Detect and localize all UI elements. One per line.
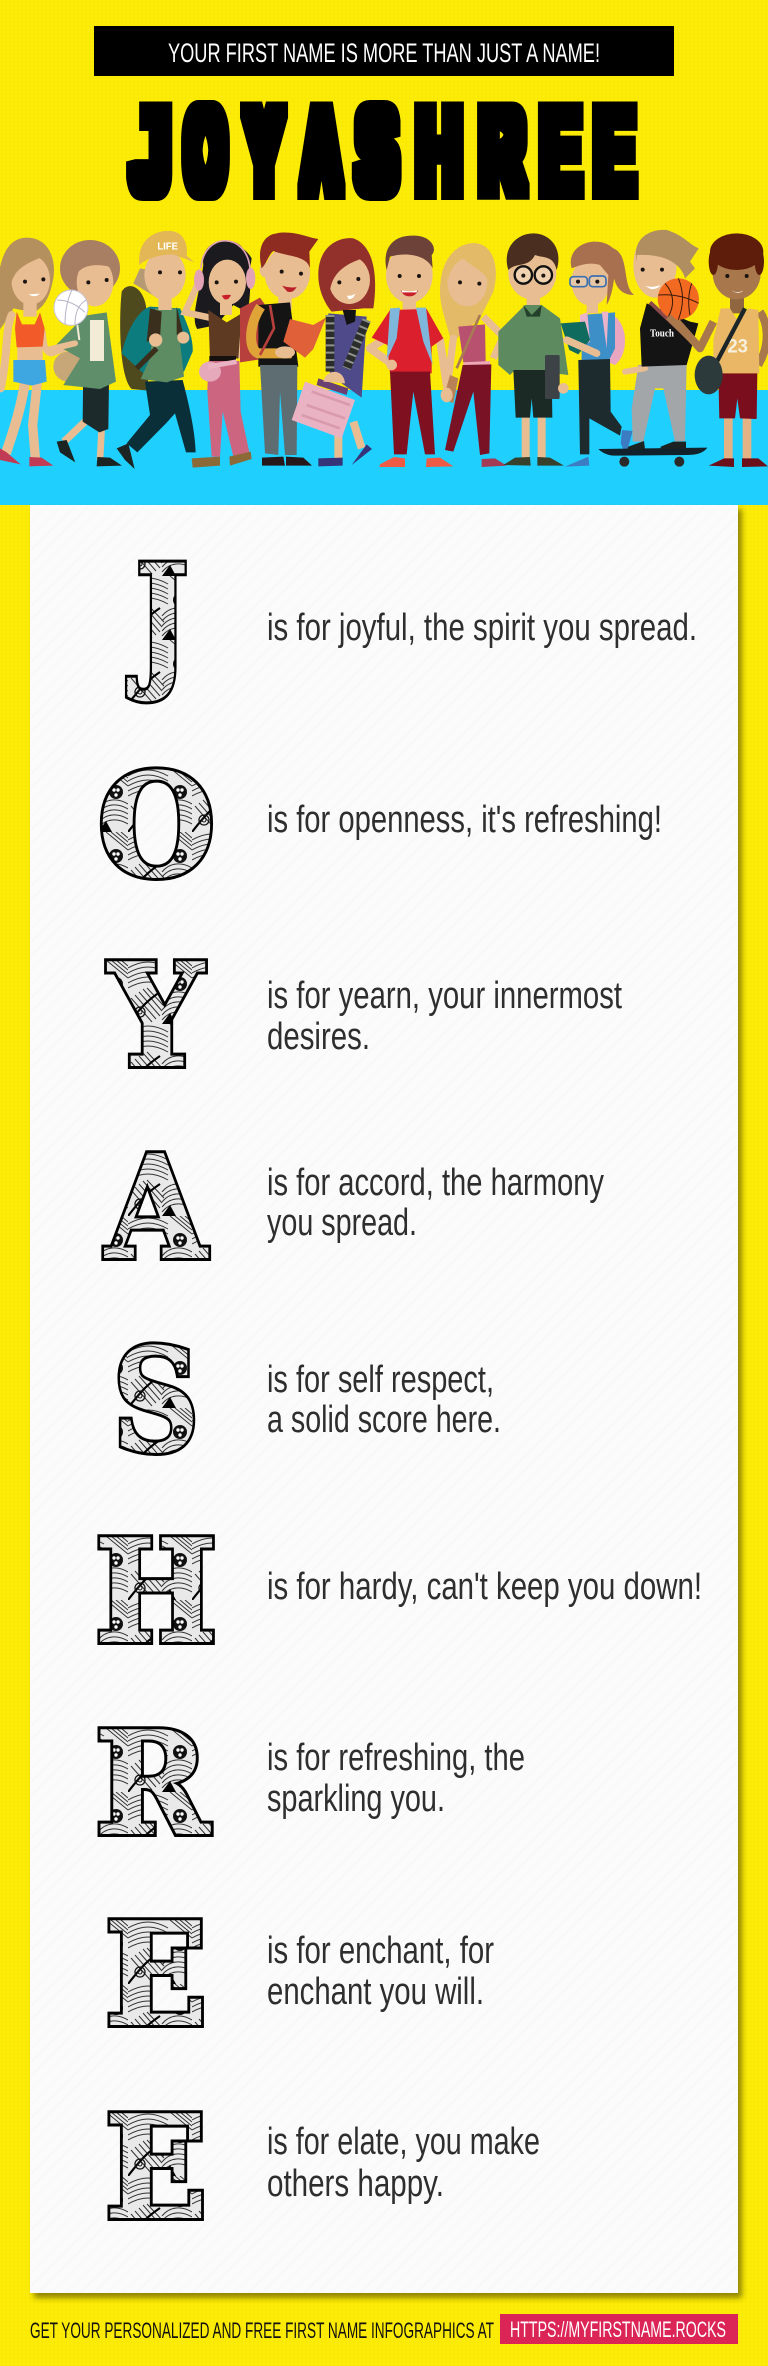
person: curly-haired boy in yellow vest bbox=[673, 233, 768, 467]
right group of people bbox=[498, 230, 768, 467]
title: O bbox=[186, 84, 225, 218]
row S: S bbox=[113, 1319, 199, 1484]
icon: basketball bbox=[658, 278, 700, 348]
row Y bbox=[107, 934, 622, 1099]
row E: enchant you will. bbox=[267, 1971, 484, 2013]
person: curly-haired boy in yellow vest: 23 bbox=[727, 336, 748, 357]
left group of people bbox=[0, 231, 255, 469]
person: red-haired girl with pink bag bbox=[292, 238, 375, 466]
header banner bbox=[94, 26, 674, 76]
row J: J bbox=[128, 534, 188, 705]
person: hiker with backpack and cap bbox=[117, 231, 220, 469]
row E second: E bbox=[105, 2086, 207, 2251]
title: A bbox=[303, 84, 340, 218]
title: J bbox=[132, 84, 170, 218]
row H: H bbox=[95, 1510, 217, 1675]
row R: is for refreshing, the bbox=[267, 1737, 525, 1779]
row O bbox=[98, 744, 662, 909]
person: hiker with backpack and cap: LIFE bbox=[157, 242, 178, 253]
person: boy with glasses and laptop bbox=[498, 233, 569, 466]
row R: R bbox=[95, 1702, 210, 1867]
title: R bbox=[480, 84, 524, 218]
illustration: group of students bbox=[0, 230, 768, 469]
row E: E bbox=[105, 1893, 207, 2058]
row S: is for self respect, bbox=[267, 1359, 494, 1401]
title bbox=[132, 84, 634, 218]
row A: A bbox=[104, 1126, 207, 1291]
person: blonde girl with shoulder bag bbox=[440, 243, 507, 467]
person: ponytail girl with tablet bbox=[561, 242, 634, 467]
row J bbox=[128, 534, 697, 705]
row Y: Y bbox=[107, 934, 204, 1099]
person: girl with headphones bbox=[185, 240, 255, 466]
row E: E bbox=[105, 1893, 207, 2058]
row E bbox=[105, 1893, 494, 2058]
panel: letter meanings bbox=[30, 505, 742, 2298]
row E: is for enchant, for bbox=[267, 1930, 494, 1972]
title: E bbox=[541, 84, 580, 218]
row O: is for openness, it's refreshing! bbox=[267, 799, 662, 841]
person: boy in red shirt bbox=[370, 236, 453, 467]
person: girl in orange top bbox=[0, 238, 75, 466]
row Y: is for yearn, your innermost bbox=[267, 975, 622, 1017]
person: boy with red book bbox=[240, 233, 326, 466]
infographic: E bbox=[595, 84, 634, 218]
row R: sparkling you. bbox=[267, 1778, 445, 1820]
row H bbox=[95, 1510, 702, 1675]
row O: O bbox=[98, 744, 215, 909]
row Y: Y bbox=[107, 934, 204, 1099]
row E second: others happy. bbox=[267, 2163, 444, 2205]
row J: J bbox=[128, 534, 188, 705]
row H: H bbox=[95, 1510, 217, 1675]
person: skater with basketball: Touch bbox=[650, 329, 674, 340]
row E second: is for elate, you make bbox=[267, 2121, 540, 2163]
person: skater with basketball bbox=[598, 230, 707, 467]
footer: GET YOUR PERSONALIZED AND FREE FIRST NAME INFOGRAPHICS AT bbox=[30, 2318, 494, 2343]
row R: R bbox=[95, 1702, 210, 1867]
row E second bbox=[105, 2086, 540, 2251]
title: S bbox=[357, 84, 397, 218]
person: girl with volleyball bbox=[47, 240, 122, 466]
row A: is for accord, the harmony bbox=[267, 1162, 604, 1204]
row S: a solid score here. bbox=[267, 1399, 501, 1441]
row E second: E bbox=[105, 2086, 207, 2251]
middle group of people bbox=[240, 233, 507, 467]
row S bbox=[113, 1319, 501, 1484]
row A: you spread. bbox=[267, 1202, 417, 1244]
title: Y bbox=[246, 84, 282, 218]
row R bbox=[95, 1702, 525, 1867]
row A bbox=[104, 1126, 604, 1291]
row Y: desires. bbox=[267, 1016, 370, 1058]
row O: O bbox=[98, 744, 215, 909]
row A: A bbox=[104, 1126, 207, 1291]
blue floor bbox=[0, 390, 768, 505]
title: H bbox=[417, 84, 461, 218]
row S: S bbox=[113, 1319, 199, 1484]
